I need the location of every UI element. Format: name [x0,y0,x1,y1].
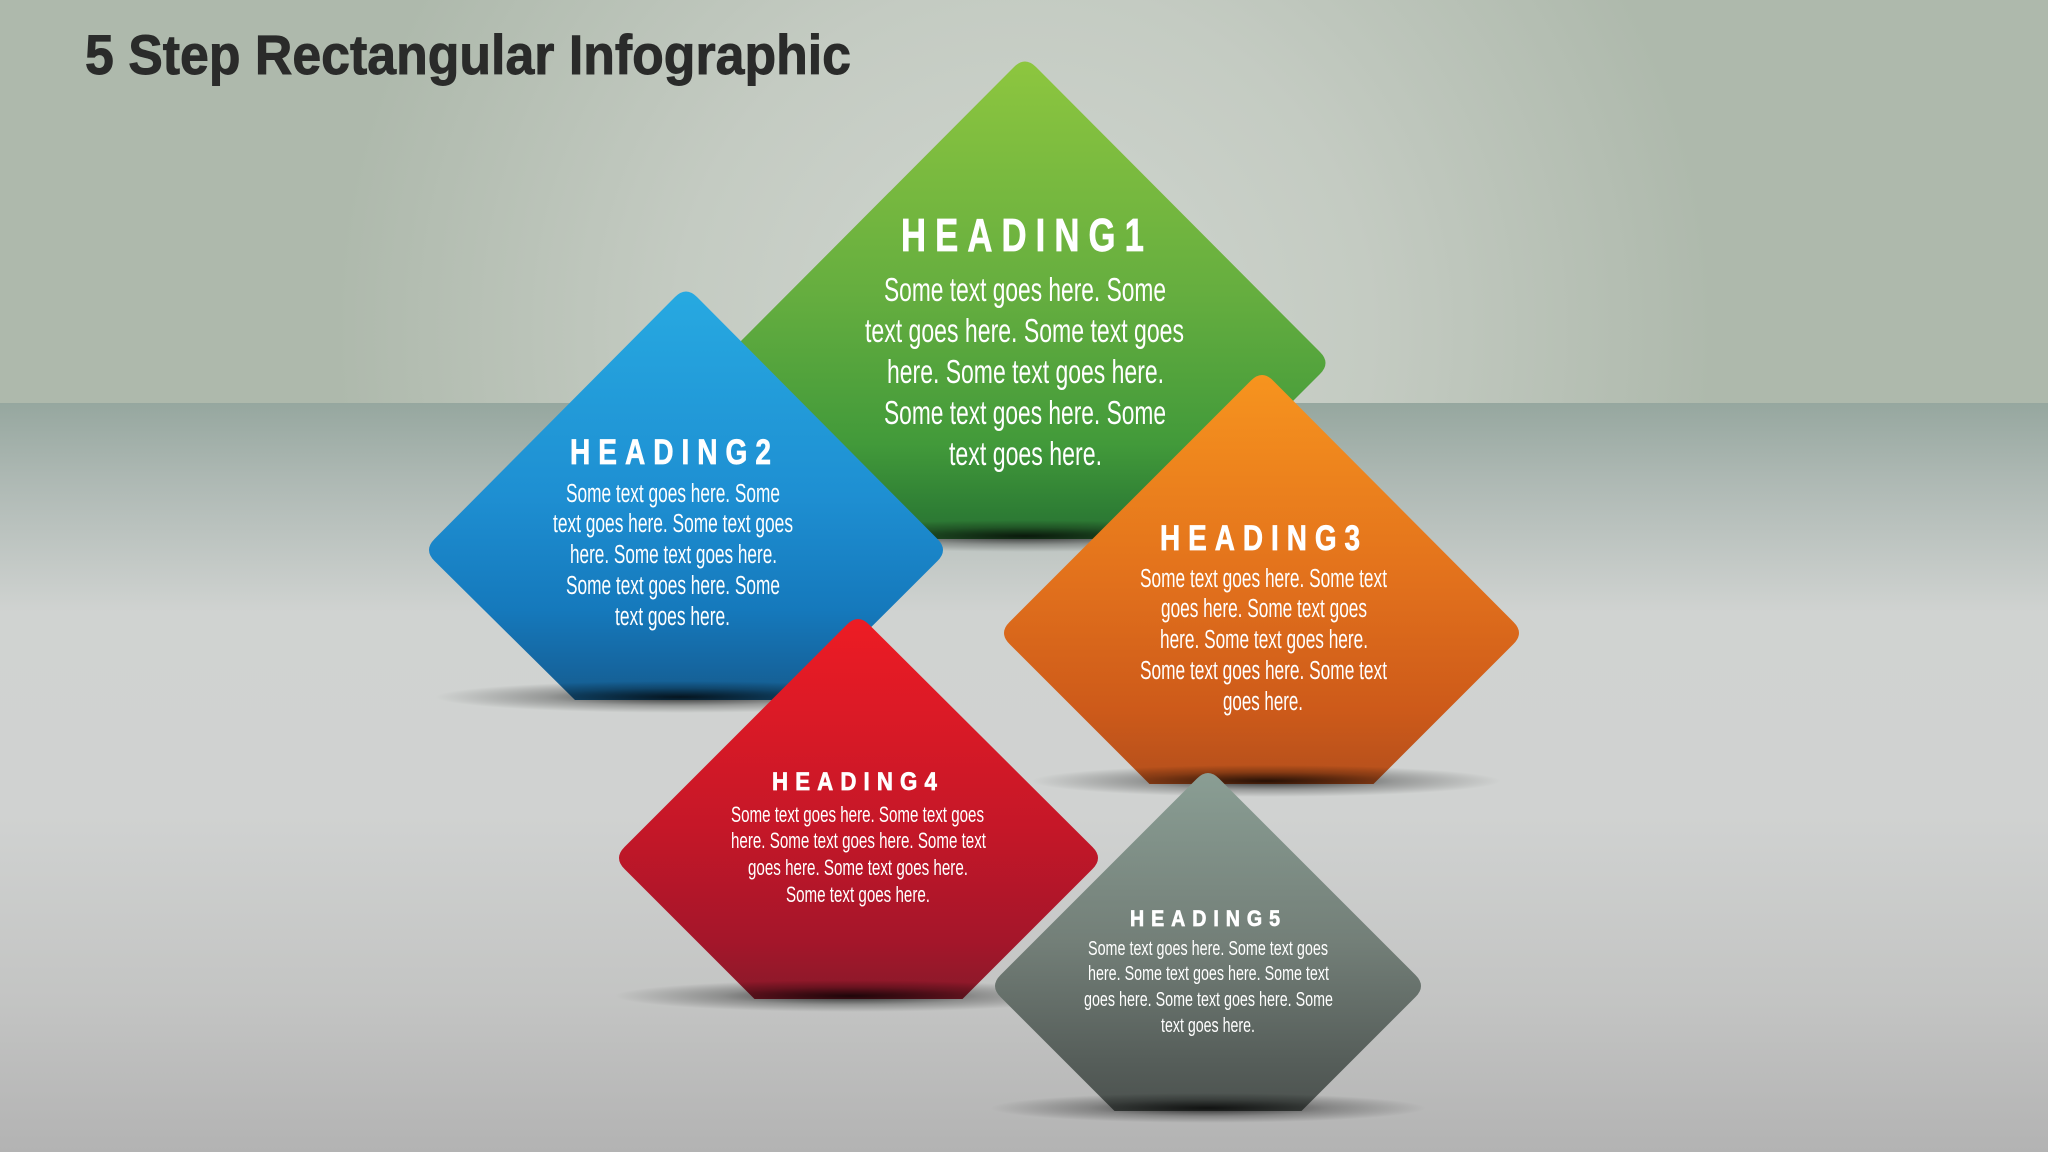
title: 5 Step Rectangular Infographic [85,23,851,86]
text: blue body: text goes here. Some text goes [553,510,793,538]
shadow: grey [990,1093,1426,1123]
text: red body: goes here. Some text goes here. [748,855,968,880]
panel: heading 2 blue [429,292,943,713]
heading: heading3: HEADING3 [1160,519,1368,558]
panel: heading 3 orange [1004,375,1519,797]
shadow: green [790,520,1260,552]
panel: heading 4 red [615,619,1098,1012]
shadow: blue [435,681,925,713]
shape: grey diamond [995,773,1421,1111]
text: orange body: goes here. Some text goes [1161,595,1367,623]
heading: heading5: HEADING5 [1130,906,1287,931]
text: orange body: Some text goes here. Some text [1140,565,1387,593]
shape: blue diamond [429,292,943,700]
shape: green diamond [724,62,1326,539]
panel: heading 1 green [724,62,1326,552]
text: blue body: text goes here. [615,603,730,631]
text: green body [865,271,1184,472]
shape: orange diamond [1004,375,1519,784]
text: grey body [1084,938,1333,1037]
text: orange body: Some text goes here. Some text [1140,657,1387,685]
text: blue body: Some text goes here. Some [566,480,780,508]
text: green body: text goes here. [949,435,1102,472]
text: red body: here. Some text goes here. Some text [731,828,986,853]
text: red body: Some text goes here. [786,882,930,907]
text: grey body: Some text goes here. Some text goes [1088,938,1328,960]
heading: heading1: HEADING1 [901,209,1153,261]
heading: heading2: HEADING2 [570,433,779,472]
background: wall with radial glow [0,0,2048,403]
panel: heading 5 grey [990,773,1426,1123]
shadow: red [615,980,1085,1012]
text: green body: Some text goes here. Some [884,394,1166,431]
text: red body: Some text goes here. Some text goes [731,802,984,827]
text: orange body [1140,565,1387,716]
text: grey body: goes here. Some text goes here. Some [1084,989,1333,1011]
text: blue body [553,480,793,631]
text: orange body: goes here. [1223,688,1303,716]
text: grey body: text goes here. [1161,1015,1255,1037]
text: blue body: Some text goes here. Some [566,572,780,600]
background: floor [0,403,2048,1152]
text: green body: here. Some text goes here. [887,353,1164,390]
shape: red diamond [619,619,1098,999]
text: blue body: here. Some text goes here. [570,541,777,569]
shadow: orange [1031,765,1501,797]
text: orange body: here. Some text goes here. [1160,626,1368,654]
text: grey body: here. Some text goes here. Some text [1088,963,1329,985]
text: red body [731,802,986,907]
text: green body: text goes here. Some text goes [865,312,1184,349]
text: green body: Some text goes here. Some [884,271,1166,308]
heading: heading4: HEADING4 [772,768,944,796]
